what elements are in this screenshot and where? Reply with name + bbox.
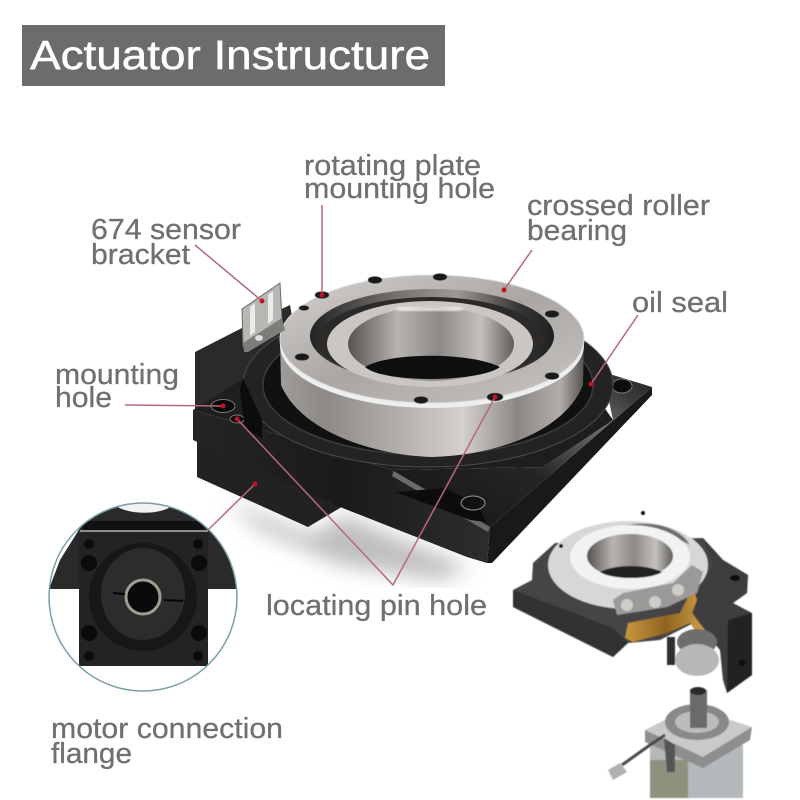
rotating cylinder side	[280, 339, 584, 457]
exploded view: motor	[608, 687, 752, 798]
mounting ear lower	[461, 496, 485, 510]
gold worm gear	[625, 587, 707, 642]
674 sensor bracket	[242, 283, 285, 352]
recess	[310, 289, 554, 383]
label: oil seal: oil seal	[632, 287, 728, 319]
label: 674 sensor bracket: 674 sensor	[91, 214, 241, 246]
plate top surface	[193, 345, 613, 470]
rear upper block	[195, 305, 300, 410]
right housing	[695, 538, 752, 693]
label: crossed roller bearing	[527, 190, 710, 247]
label: crossed roller bearing: bearing	[527, 215, 627, 247]
leader lines	[125, 205, 638, 585]
label: rotating plate mounting hole: rotating plate	[304, 150, 481, 182]
label: 674 sensor bracket	[91, 214, 241, 271]
title banner	[22, 25, 445, 86]
title banner: Actuator Instructure	[30, 32, 430, 78]
label: crossed roller bearing: crossed roller	[527, 190, 710, 222]
plate front holes	[211, 400, 235, 412]
label: rotating plate mounting hole: mounting hole	[304, 173, 495, 205]
black flange	[243, 303, 613, 467]
label: mounting hole: hole	[55, 382, 112, 414]
outer silver ring	[548, 521, 708, 609]
plate right thin side	[487, 387, 652, 563]
lower motor block	[197, 440, 345, 527]
plate left side face	[193, 410, 490, 563]
main actuator illustration	[193, 274, 652, 580]
bore	[348, 307, 514, 381]
label: rotating plate mounting hole	[304, 150, 495, 205]
bearing ring	[570, 525, 690, 589]
label: locating pin hole: locating pin hole	[266, 590, 487, 622]
label: mounting hole: mounting	[55, 359, 179, 391]
red marker dots	[220, 288, 594, 486]
motor connection flange inset	[49, 503, 240, 691]
label: mounting hole	[55, 359, 179, 414]
label: motor connection flange: flange	[51, 738, 132, 770]
upper right mounting hole	[612, 379, 632, 393]
label: motor connection flange: motor connection	[51, 713, 283, 745]
rollers	[613, 565, 703, 615]
label: 674 sensor bracket: bracket	[91, 239, 190, 271]
label: motor connection flange	[51, 713, 283, 770]
top silver ring	[280, 275, 584, 403]
mounting holes on ring	[295, 274, 559, 404]
inner silver ring	[327, 301, 533, 387]
exploded view: gearbox	[513, 511, 752, 693]
motor coupling	[667, 637, 675, 665]
plate stepped top surface	[392, 372, 652, 527]
